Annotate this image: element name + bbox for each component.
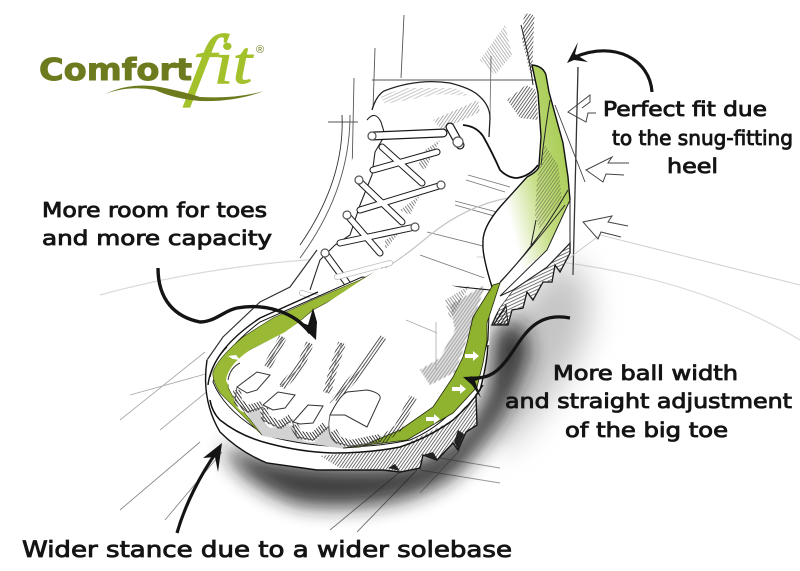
toe nails — [330, 390, 380, 427]
background construction lines — [100, 15, 800, 532]
foot sketch marks — [406, 320, 437, 370]
arrow: toes callout — [158, 268, 317, 340]
text: more ball width: More ball width — [553, 361, 738, 385]
text: more ball width: and straight adjustment — [505, 389, 792, 413]
lace strands: fill — [325, 147, 442, 287]
arrow: heel callout — [567, 42, 652, 92]
lace strands: outline — [325, 147, 442, 287]
green comfort zone: arch and ball — [343, 283, 500, 448]
toe divider lines — [267, 337, 383, 403]
laces — [302, 127, 463, 312]
outsole lugs: heel section — [492, 243, 570, 325]
arrow: ball callout — [463, 317, 570, 398]
sole side wall — [206, 268, 545, 472]
text: perfect fit: to the snug-fitting — [612, 126, 793, 150]
logo letters it: it — [214, 30, 254, 96]
tongue shading — [380, 88, 480, 250]
foot body — [226, 268, 472, 447]
logo swoosh — [105, 86, 264, 101]
logo letter f: f — [182, 20, 233, 108]
outline arrows pointing to heel — [568, 95, 629, 239]
hatching at ball of foot — [420, 285, 485, 385]
small white direction arrows — [228, 351, 479, 424]
green comfort zone: heel — [483, 65, 570, 296]
arrow: sole callout — [177, 443, 222, 533]
registered mark: ® — [256, 44, 264, 56]
logo: Comfort fit — [39, 20, 264, 108]
logo word: Comfort: Comfort — [39, 53, 192, 88]
text: perfect fit: Perfect fit due — [603, 97, 767, 121]
toe tip outlines — [235, 387, 380, 446]
text: perfect fit: heel — [667, 154, 718, 178]
ankle and leg hatching — [480, 14, 538, 120]
green comfort zone: toes — [213, 268, 382, 435]
hatched toe tips — [237, 390, 380, 444]
ground shadow — [222, 260, 590, 507]
text: wider stance: Wider stance due to a wider solebase — [22, 538, 512, 563]
faded lower laces — [302, 263, 390, 312]
text: more room for toes: and more capacity — [42, 226, 272, 250]
insole fill — [213, 277, 490, 449]
eyelets — [321, 132, 463, 257]
top lace — [372, 127, 460, 145]
white rim band — [208, 292, 488, 453]
text: more room for toes: More room for toes — [42, 198, 267, 222]
soft hatched toe gaps — [267, 337, 413, 442]
text: more ball width: of the big toe — [565, 418, 728, 442]
foot — [226, 268, 485, 447]
shoe upper — [207, 82, 540, 360]
